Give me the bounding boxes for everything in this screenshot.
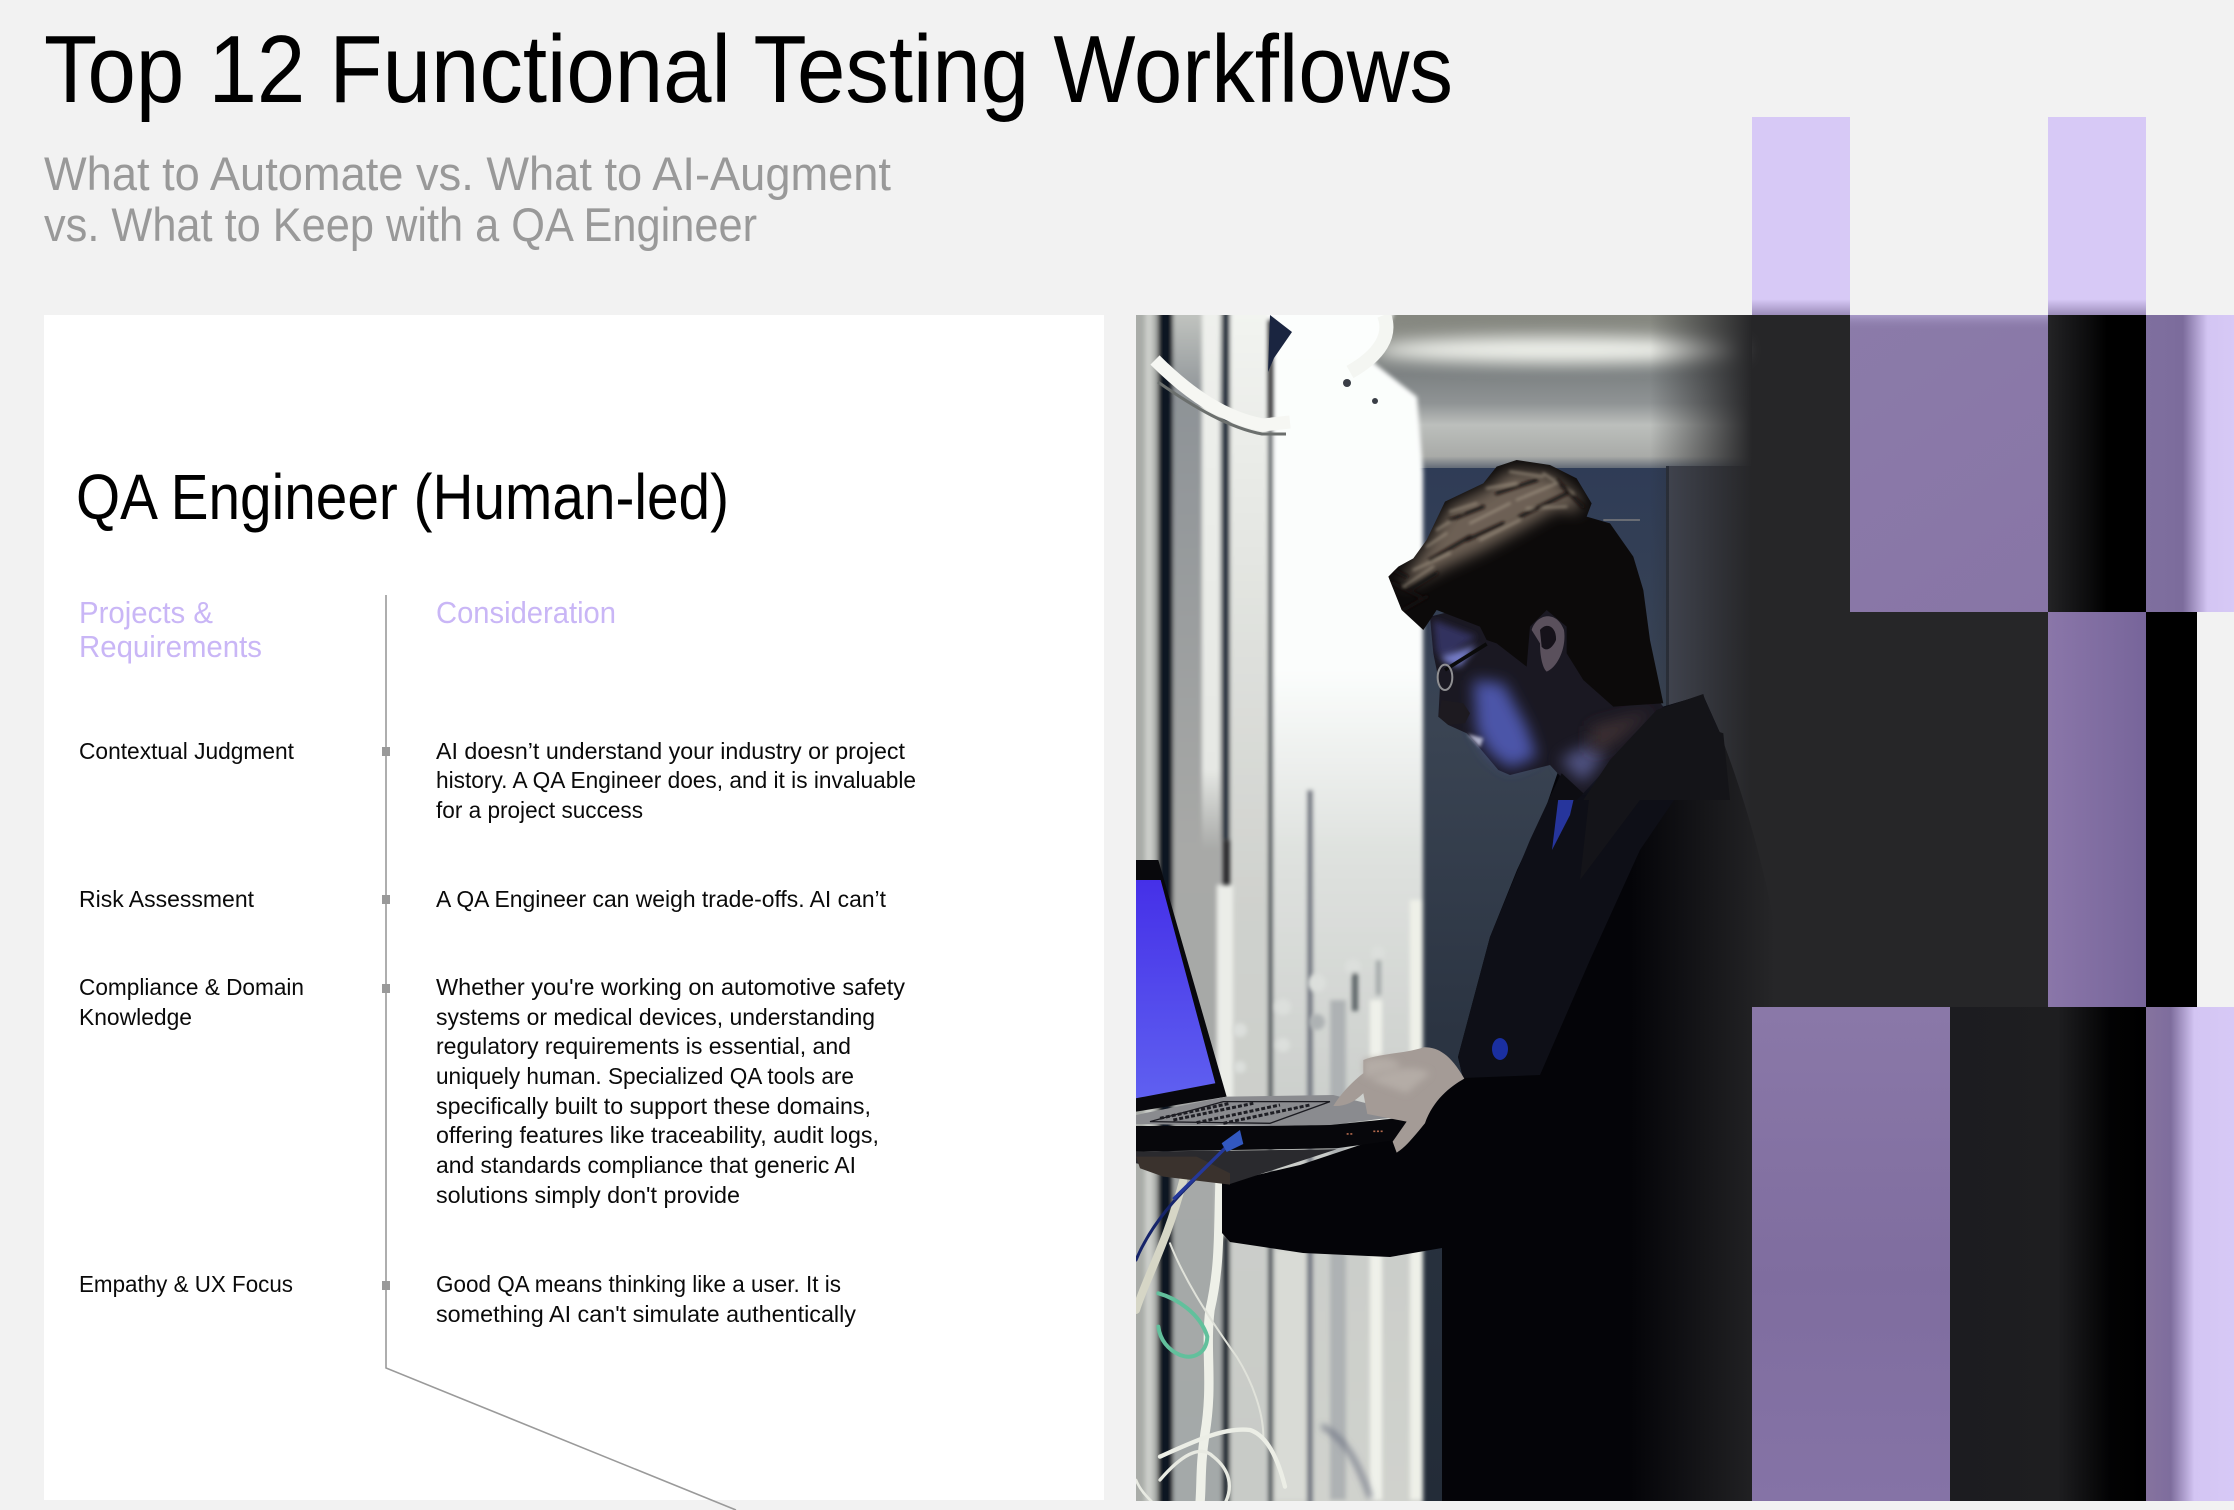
subtitle: What to Automate vs. What to AI-Augment — [44, 147, 891, 200]
row: compliance and domain knowledge: Compliance & Domain — [79, 974, 304, 1000]
row: contextual judgment: history. A QA Engineer does, and it is invaluable — [436, 767, 916, 793]
subtitle: vs. What to Keep with a QA Engineer — [44, 198, 757, 251]
row: contextual judgment: for a project success — [436, 797, 643, 823]
title: Top 12 Functional Testing Workflows — [44, 16, 1453, 123]
cables — [1136, 1150, 1370, 1503]
corridor background — [1360, 315, 1752, 1501]
decorative blocks: middle purple and black — [2048, 612, 2197, 1007]
row: empathy and UX focus: Good QA means thinking like a user. It is — [436, 1271, 841, 1297]
glasses — [1445, 644, 1487, 670]
column heading: projects and requirements — [79, 596, 262, 664]
row: risk assessment — [79, 886, 887, 912]
server racks — [1130, 310, 1423, 1510]
row: empathy and UX focus — [79, 1271, 856, 1327]
row: compliance and domain knowledge: regulatory requirements is essential, and — [436, 1033, 851, 1059]
laptop — [1136, 860, 1464, 1199]
panel: QA Engineer (Human-led) — [44, 315, 1104, 1510]
row: compliance and domain knowledge: Knowledge — [79, 1004, 192, 1030]
photo: engineer with laptop in server room — [1136, 315, 2048, 1501]
lapel and shirt — [1458, 695, 1720, 1078]
decorative blocks: lower purple and black — [1752, 1007, 2234, 1501]
engineer's head — [1388, 460, 1730, 800]
decorative blocks: upper purple and black — [1850, 315, 2234, 612]
column heading: projects and requirements: Requirements — [79, 630, 262, 664]
row: risk assessment: Risk Assessment — [79, 886, 255, 912]
row: contextual judgment: Contextual Judgment — [79, 738, 295, 764]
collar — [1596, 694, 1729, 790]
hand on keyboard — [1333, 1047, 1464, 1153]
face and neck — [1430, 607, 1663, 793]
row: contextual judgment — [79, 738, 916, 823]
usb connector and cable — [1173, 1148, 1225, 1199]
row: compliance and domain knowledge: Whether you're working on automotive safety — [436, 974, 906, 1000]
row: compliance and domain knowledge: offering features like traceability, audit logs, — [436, 1122, 879, 1148]
row: compliance and domain knowledge — [79, 974, 906, 1208]
subtitle — [44, 147, 891, 251]
column heading: projects and requirements: Projects & — [79, 596, 213, 630]
row: risk assessment: A QA Engineer can weigh trade-offs. AI can’t — [436, 886, 887, 912]
engineer's coat — [1222, 695, 1800, 1501]
panel heading: QA Engineer (Human-led) — [76, 461, 729, 533]
row: compliance and domain knowledge: uniquely human. Specialized QA tools are — [436, 1063, 854, 1089]
column heading: consideration: Consideration — [436, 596, 616, 630]
decorative block: top lilac bars — [1752, 117, 2146, 315]
row: compliance and domain knowledge: solutions simply don't provide — [436, 1182, 740, 1208]
hair — [1388, 460, 1663, 707]
row: empathy and UX focus: something AI can't simulate authentically — [436, 1301, 856, 1327]
ear — [1532, 616, 1564, 672]
row: empathy and UX focus: Empathy & UX Focus — [79, 1271, 293, 1297]
timeline connector — [382, 595, 736, 1510]
row: compliance and domain knowledge: systems or medical devices, understanding — [436, 1004, 875, 1030]
row: contextual judgment: AI doesn’t understand your industry or project — [436, 738, 906, 764]
row: compliance and domain knowledge: specifically built to support these domains, — [436, 1093, 871, 1119]
row: compliance and domain knowledge: and standards compliance that generic AI — [436, 1152, 856, 1178]
